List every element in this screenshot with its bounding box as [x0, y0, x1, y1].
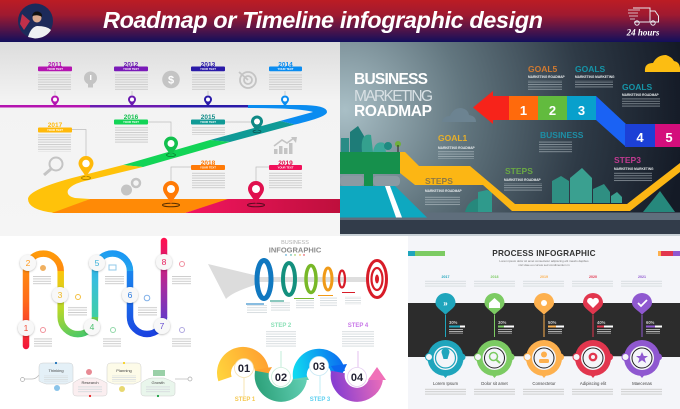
year labels: 2017 — [48, 122, 63, 129]
year labels: 2016 — [124, 114, 139, 121]
goal subheadings: MARKETING ROADMAP — [528, 75, 566, 79]
step arrow 1 — [224, 354, 272, 381]
card: Research: Research — [81, 380, 99, 385]
step labels: STEP 3 — [310, 397, 331, 403]
heading subtitle: Lorem ipsum dolor sit amet consectetur adipiscing elit mauris dapibus — [499, 259, 589, 263]
year labels: 2018 — [201, 160, 216, 167]
panel title: ROADMAP — [354, 103, 432, 120]
goal headings — [425, 64, 653, 186]
step 2019: Consectetur — [532, 381, 556, 386]
goal subheadings: MARKETING ROADMAP — [425, 189, 463, 193]
teal road — [340, 186, 427, 218]
node numbers: 2 — [26, 258, 31, 268]
wavy chain between nodes — [462, 356, 626, 358]
heading subtitle — [499, 259, 589, 267]
step 2017: 2017 — [442, 275, 450, 279]
step 2021 — [621, 275, 662, 395]
heading dots — [285, 254, 305, 256]
step labels — [235, 323, 369, 403]
goal headings: GOAL5 — [528, 64, 558, 74]
step numbers: 03 — [313, 361, 325, 373]
goal body placeholders — [425, 80, 660, 206]
accent bar left — [408, 251, 445, 256]
heading: PROCESS INFOGRAPHIC — [492, 249, 596, 258]
panel: numbered snake timeline — [18, 241, 192, 397]
process cards — [20, 362, 192, 397]
step 2017: Lorem Ipsum — [433, 381, 458, 386]
beam through rings — [255, 277, 372, 282]
icon: magnifier — [44, 158, 62, 175]
step 2021: Maecenas — [632, 381, 652, 386]
accent bar right — [658, 251, 680, 256]
dark band — [408, 303, 680, 357]
title: Roadmap or Timeline infographic design — [103, 7, 543, 33]
step connector lines — [244, 351, 358, 396]
step arrow 2 — [262, 367, 309, 395]
ring 4 — [324, 268, 332, 290]
heading — [269, 240, 322, 254]
step 2019 — [523, 275, 564, 395]
step arrow 4 — [338, 367, 386, 395]
arrow segment 1 — [509, 96, 538, 120]
step 2020: 2020 — [589, 275, 597, 279]
icon: gears and coin — [121, 179, 140, 196]
node numbers: 8 — [162, 257, 167, 267]
label tags: YOUR TEXT — [277, 166, 294, 170]
step 2018: 30% — [498, 320, 507, 325]
label tags: YOUR TEXT — [47, 67, 63, 71]
panel: timeline road roadmap — [0, 42, 340, 236]
icon: author avatar — [18, 4, 53, 38]
card: Planning — [107, 363, 141, 384]
arrow: red head — [473, 91, 510, 124]
year labels — [48, 62, 293, 167]
goal headings: GOALS — [575, 64, 606, 74]
year labels: 2013 — [201, 62, 216, 68]
goal headings: STEPS — [505, 166, 533, 176]
step 2020: Adipiscing elit — [580, 381, 607, 386]
panel title — [354, 71, 433, 120]
connector lines — [55, 91, 285, 181]
buildings: left — [341, 126, 401, 152]
step captions — [33, 275, 191, 347]
arrow segment 2: 2 — [549, 103, 556, 118]
green platform — [340, 152, 400, 186]
ring captions — [247, 296, 361, 314]
panel: process infographic — [408, 236, 680, 409]
card: Growth — [141, 378, 175, 396]
body text placeholders — [38, 73, 302, 189]
label tags: YOUR TEXT — [123, 120, 139, 124]
label tags: YOUR TEXT — [200, 166, 216, 170]
card dots and icons — [54, 362, 165, 397]
label tags: YOUR TEXT — [277, 67, 294, 71]
card: Planning: Planning — [116, 368, 132, 373]
goal subheadings: MARKETING ROADMAP — [438, 146, 476, 150]
heading: BUSINESS — [281, 240, 309, 246]
icon: target — [239, 72, 256, 88]
yellow path — [400, 152, 680, 211]
ring 2 — [283, 263, 295, 295]
step 2019: 50% — [548, 320, 557, 325]
label tags: YOUR TEXT — [47, 128, 63, 132]
numbered nodes — [18, 254, 172, 336]
card: Thinking — [39, 363, 73, 384]
node numbers: 4 — [90, 322, 95, 332]
arrow segment 5: 5 — [665, 130, 673, 145]
pin markers — [51, 96, 289, 207]
year labels: 2012 — [124, 62, 139, 68]
road strip — [340, 212, 680, 236]
arrow segment 3 — [567, 96, 596, 120]
arrow segment 3: 3 — [578, 103, 585, 118]
buildings: lower — [465, 190, 675, 212]
step arrow 3 — [300, 356, 347, 379]
step numbers — [238, 361, 364, 384]
heading: INFOGRAPHIC — [269, 246, 322, 254]
label tags: YOUR TEXT — [200, 67, 216, 71]
panel: business marketing roadmap — [340, 42, 680, 236]
step 2019: 2019 — [540, 275, 548, 279]
icon: growth chart — [274, 137, 297, 154]
step 2020 — [572, 275, 613, 395]
step 2018: 2018 — [490, 275, 498, 279]
label tags: YOUR TEXT — [200, 120, 216, 124]
goal subheadings: MARKETING MARKETING — [614, 167, 654, 171]
step numbers: 02 — [275, 372, 287, 384]
card: Thinking: Thinking — [48, 368, 64, 373]
icon: dollar coin — [162, 71, 180, 88]
label tags — [38, 66, 302, 170]
node numbers: 6 — [128, 290, 133, 300]
target — [368, 260, 386, 298]
year labels: 2019 — [278, 160, 293, 167]
step 2017 — [425, 275, 466, 395]
card: Research — [73, 378, 107, 396]
cloud: grey — [442, 108, 476, 122]
step numbers: 01 — [238, 363, 250, 375]
ring 1 — [257, 260, 271, 298]
arrow segment 5 — [655, 124, 680, 147]
step 2018: Dolor sit amet — [481, 381, 509, 386]
arrow segment 1: 1 — [520, 103, 527, 118]
heading subtitle: nisl vitae eu cursus sed condimentum in — [518, 263, 570, 267]
card: Growth: Growth — [152, 380, 164, 385]
step 2020: 40% — [597, 320, 606, 325]
year labels: 2015 — [201, 114, 216, 121]
small step icons — [40, 262, 184, 332]
step 2017: 30% — [449, 320, 458, 325]
step labels: STEP 4 — [348, 323, 369, 329]
arrow segment 2 — [538, 96, 567, 120]
goal headings: BUSINESS — [540, 130, 584, 140]
road ribbon — [0, 105, 340, 213]
node numbers: 3 — [58, 290, 63, 300]
funnel — [208, 264, 258, 299]
goal headings: STEP3 — [614, 155, 641, 165]
ring 5 — [339, 270, 345, 288]
icon: delivery truck 24 hours: 24 hours — [626, 28, 660, 38]
step labels: STEP 2 — [271, 323, 292, 329]
icon: light bulb — [84, 72, 97, 88]
step numbers: 04 — [351, 372, 364, 384]
node numbers: 7 — [160, 321, 165, 331]
step 2021: 2021 — [638, 275, 646, 279]
step 2018 — [474, 275, 515, 395]
node numbers — [24, 257, 167, 333]
arrow diagonal — [596, 96, 626, 146]
step 2021: 60% — [646, 320, 655, 325]
arrow segment 4 — [625, 124, 655, 147]
goal headings: GOAL1 — [438, 133, 468, 143]
arrow segment 4: 4 — [636, 130, 644, 145]
year labels: 2014 — [278, 62, 293, 68]
goal subheadings: MARKETING ROADMAP — [504, 178, 542, 182]
ring 3 — [306, 266, 316, 292]
goal headings: STEPS — [425, 176, 453, 186]
node numbers: 5 — [95, 258, 100, 268]
goal headings: GOALS — [622, 82, 653, 92]
header banner — [0, 0, 680, 42]
panel title: MARKETING — [354, 88, 433, 105]
step labels: STEP 1 — [235, 397, 256, 403]
ring caption markers — [246, 292, 355, 304]
label tags: YOUR TEXT — [123, 67, 139, 71]
goal subheadings — [425, 75, 660, 193]
icon: dollar coin: $ — [168, 74, 174, 86]
goal subheadings: MARKETING MARKETING — [575, 75, 615, 79]
panel: business infographic funnel and arrows — [208, 240, 386, 403]
icon: delivery truck 24 hours — [626, 8, 660, 38]
goal subheadings: MARKETING ROADMAP — [622, 93, 660, 97]
node numbers: 1 — [24, 323, 29, 333]
step number circles — [234, 356, 366, 386]
buildings: right — [552, 168, 622, 203]
panel title: BUSINESS — [354, 71, 428, 88]
year labels: 2011 — [48, 62, 62, 68]
cloud: yellow — [645, 55, 680, 72]
step captions — [266, 331, 374, 347]
step 2017: » — [443, 299, 448, 308]
snake path — [26, 241, 164, 346]
